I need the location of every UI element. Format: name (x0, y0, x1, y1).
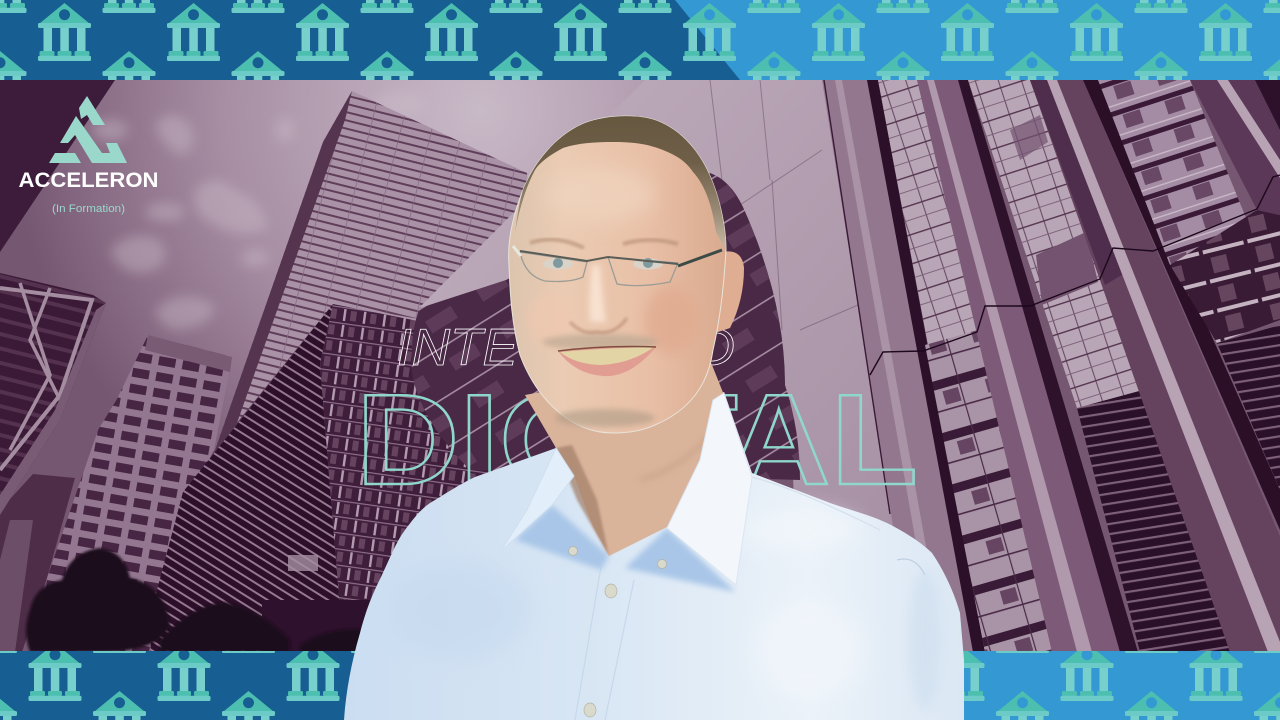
shirt under-collar shadow (515, 505, 736, 592)
right facade: dark strip 3 (1083, 80, 1280, 530)
logo mark (49, 96, 127, 163)
right facade: dark strip 1 (867, 80, 985, 652)
glasses (513, 246, 722, 286)
building: tall glass tower (210, 91, 528, 458)
eyebrows (530, 239, 678, 248)
logo note: (In Formation) (52, 203, 125, 215)
title line: Integrated: INTEGRATED (397, 319, 735, 377)
right facade: louvre panel 3 (1217, 325, 1280, 490)
logo wordmark: ACCELERON (18, 169, 158, 192)
right facade: wall column (822, 80, 973, 652)
left collar (501, 448, 574, 551)
building: truss tower left (0, 273, 106, 515)
right facade: glass strip 3 (1098, 80, 1257, 265)
right facade: column B (917, 80, 1052, 651)
wall: pale facade (420, 80, 893, 526)
hair (515, 116, 726, 250)
face shading (536, 170, 690, 430)
shirt (344, 392, 964, 720)
building: lower left tower (0, 474, 75, 652)
building: mid-rise tower (40, 335, 232, 652)
portrait: smiling man in a pale blue shirt (344, 116, 964, 720)
title line: Digital: DIGITAL (356, 368, 918, 512)
clouds (90, 114, 292, 333)
right collar (667, 393, 752, 585)
right facade: glass strip 2 (968, 80, 1143, 408)
right facade: louvre panel 2 (1077, 390, 1230, 652)
mouth (558, 346, 656, 376)
nose (570, 265, 627, 333)
building: curved dark glass (412, 173, 800, 480)
right facade: glass strip 1 (878, 80, 1052, 652)
right ear (717, 251, 744, 332)
building: dark reflective block, right face (320, 304, 493, 600)
top band: bank icon pattern (0, 0, 1280, 80)
building: dark reflective block, left face (150, 304, 345, 652)
shirt buttons (568, 546, 666, 717)
sky (0, 80, 1280, 651)
head (509, 116, 726, 433)
trees (26, 548, 370, 652)
building: dark tower top left (0, 80, 115, 252)
right facade: dark strip 2 (958, 80, 1138, 652)
background photo: city towers in purple duotone (0, 80, 1280, 652)
right facade: column C (1030, 80, 1280, 652)
logo: Acceleron (18, 96, 158, 215)
eyes (543, 258, 663, 270)
neck (525, 360, 724, 556)
joint line across the columns (870, 175, 1280, 375)
right facade: column D (1190, 80, 1280, 215)
bottom band: bank icon pattern (0, 651, 1280, 720)
shirt placket (575, 567, 634, 720)
shirt shading (390, 477, 941, 710)
